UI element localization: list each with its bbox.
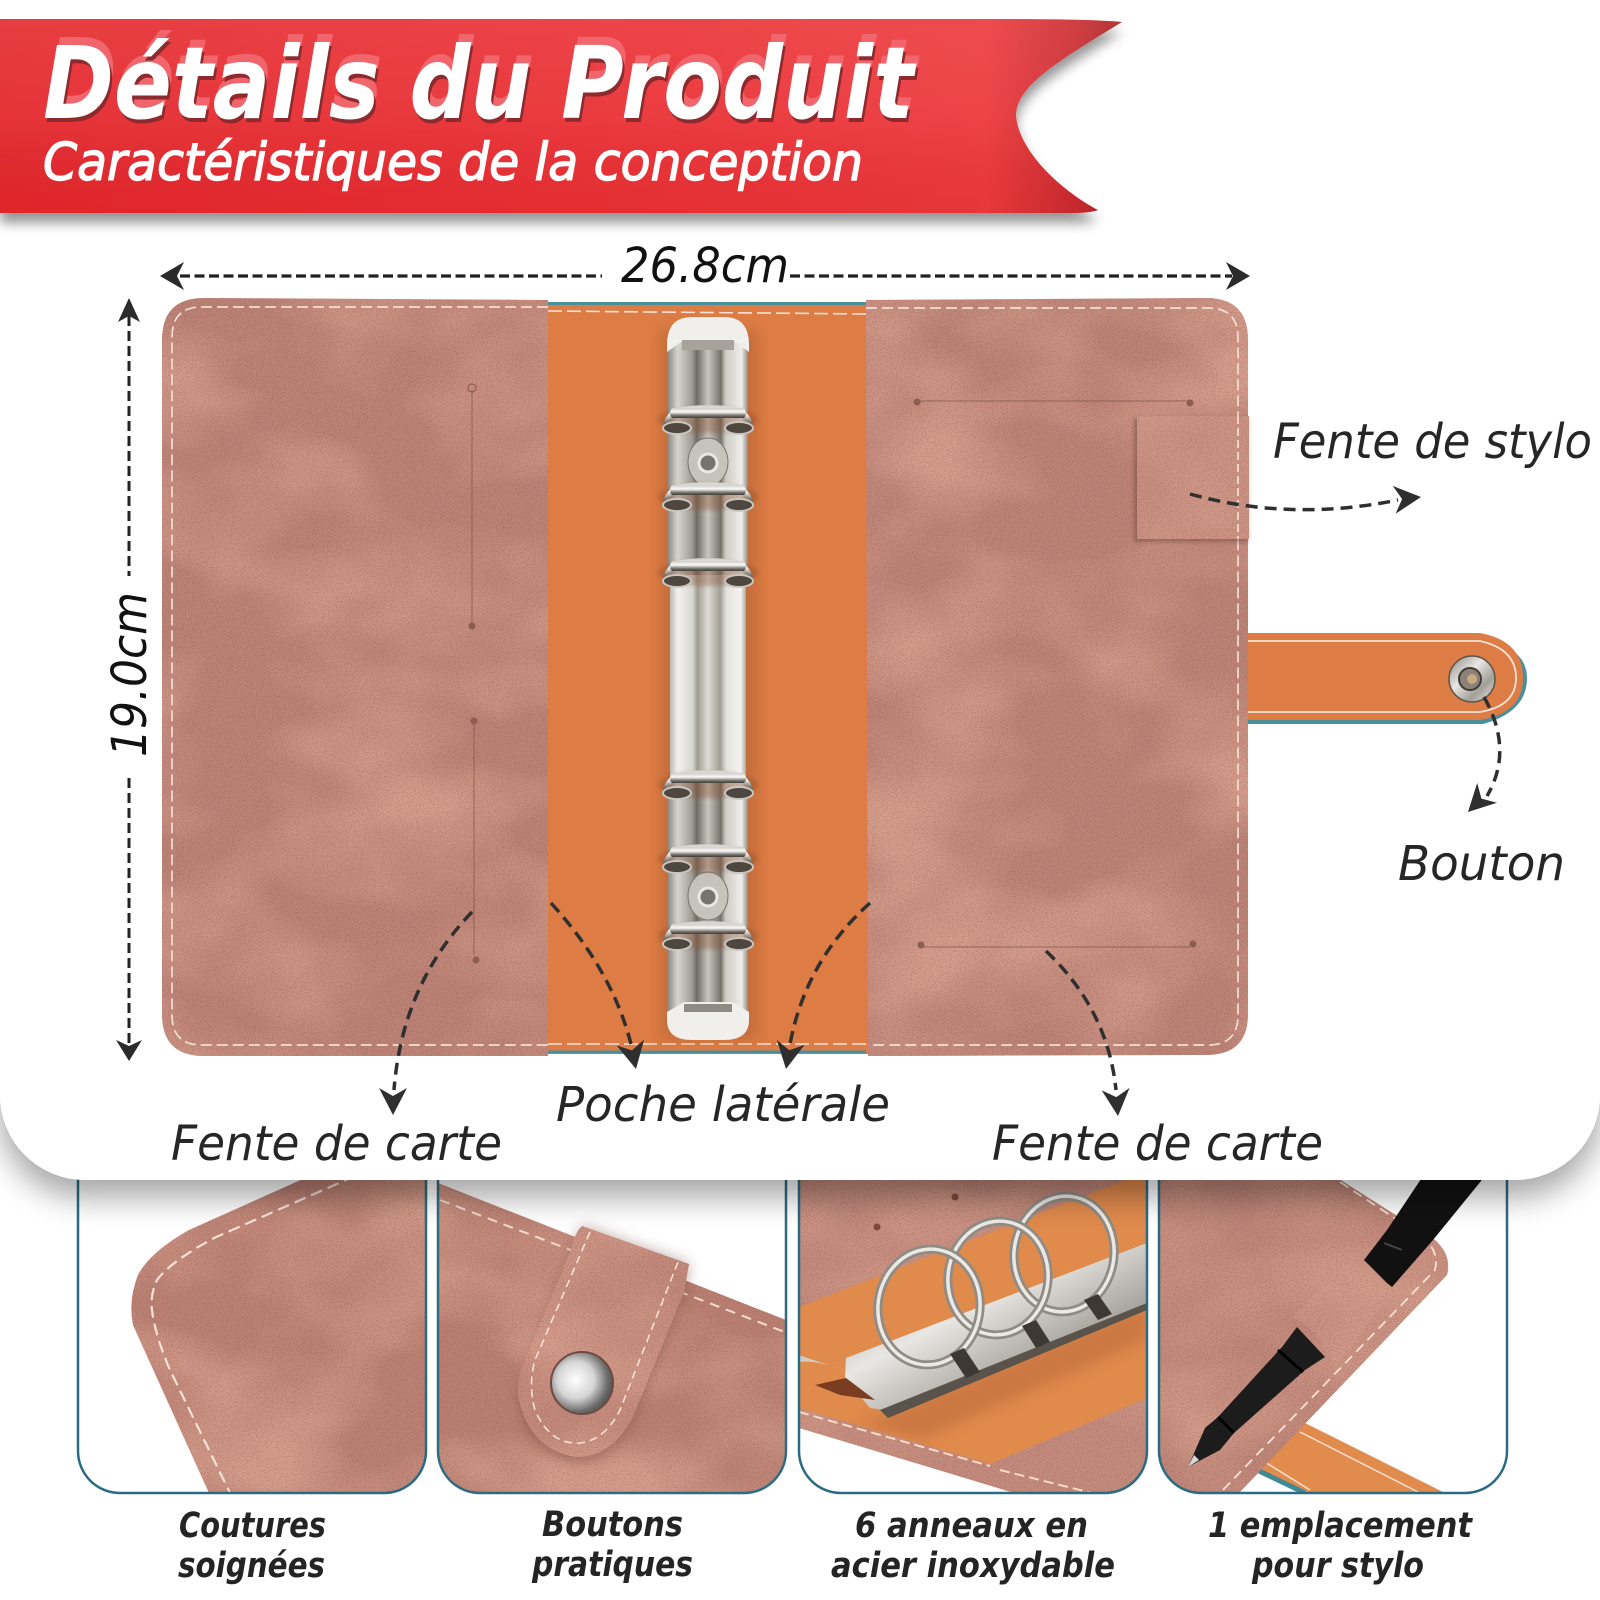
- heading: Détails du Produit: [46, 17, 920, 134]
- panel: snap button detail photo: [436, 1180, 788, 1494]
- width dimension 26.8cm: [160, 238, 1250, 294]
- white main panel: [0, 0, 1600, 1180]
- arrow: right card slot: [1046, 951, 1132, 1117]
- caption: pen slot: [1208, 1506, 1473, 1586]
- caption: stitching: Coutures: [179, 1506, 326, 1546]
- caption: pen slot: pour stylo: [1251, 1546, 1424, 1586]
- ribbon: [0, 19, 1122, 213]
- open planner: [162, 298, 1527, 1056]
- panel: steel rings detail photo: [798, 1180, 1148, 1494]
- arrow: button: [1458, 697, 1500, 822]
- arrow: pen slot: [1190, 483, 1422, 514]
- heading: Détails du Produit: [43, 25, 917, 142]
- ring mechanism: [658, 317, 758, 1040]
- bottom section: [668, 780, 748, 1020]
- strap shadow: [518, 1226, 689, 1462]
- leather strap: [518, 1226, 689, 1457]
- subheading: Caractéristiques de la conception: [43, 133, 863, 193]
- caption: rings: 6 anneaux en: [855, 1506, 1088, 1546]
- label: left card slot: Fente de carte: [171, 1116, 502, 1172]
- caption: rings: [831, 1506, 1115, 1586]
- caption: rings: acier inoxydable: [831, 1546, 1115, 1586]
- title banner: [0, 17, 1122, 213]
- middle section: [670, 575, 746, 785]
- caption: buttons: [531, 1505, 693, 1585]
- rings: six pairs: [658, 405, 758, 950]
- snap stud: [551, 1352, 613, 1414]
- orange strap: [1257, 1423, 1445, 1493]
- caption: buttons: Boutons: [542, 1505, 683, 1545]
- arrow: side pocket left: [551, 903, 650, 1072]
- pen tab: [1292, 1272, 1368, 1340]
- label: Bouton: Bouton: [1398, 836, 1565, 892]
- black pen lower: [1188, 1327, 1325, 1467]
- caption: pen slot: 1 emplacement: [1208, 1506, 1473, 1546]
- black pen top: [1364, 1180, 1482, 1287]
- label: right card slot: Fente de carte: [992, 1116, 1323, 1172]
- eyelet rivets: [688, 438, 728, 486]
- pen loop tab: [1134, 416, 1249, 542]
- bottom cap: [667, 1002, 749, 1040]
- arrow: left card slot: [379, 912, 472, 1115]
- metal bar: [845, 1243, 1147, 1410]
- leather cover: [1159, 1170, 1448, 1493]
- arrow: side pocket right: [772, 903, 870, 1071]
- caption: stitching: soignées: [178, 1546, 325, 1586]
- caption: buttons: pratiques: [531, 1545, 693, 1585]
- panel: pen holder detail photo: [1158, 1180, 1508, 1494]
- closure strap: [1248, 633, 1527, 724]
- left leather cover: [162, 298, 548, 1056]
- height dimension 19.0cm: 19.0cm: [102, 592, 158, 757]
- panel: stitching detail photo: [76, 1180, 428, 1494]
- top cap: [667, 317, 749, 352]
- snap fastener: [1449, 656, 1495, 702]
- mechanism shadow: [660, 330, 758, 1040]
- ring clasps: [950, 1294, 1112, 1378]
- three rings: [870, 1190, 1122, 1372]
- height dimension 19.0cm: [102, 298, 158, 1061]
- top section: [668, 338, 748, 578]
- width dimension 26.8cm: 26.8cm: [621, 238, 789, 294]
- caption: stitching: [178, 1506, 326, 1586]
- right leather cover: [866, 298, 1248, 1056]
- center orange lining: [546, 302, 868, 1054]
- label: side pocket: Poche latérale: [556, 1077, 890, 1133]
- heading: Détails du Produit: [45, 29, 919, 146]
